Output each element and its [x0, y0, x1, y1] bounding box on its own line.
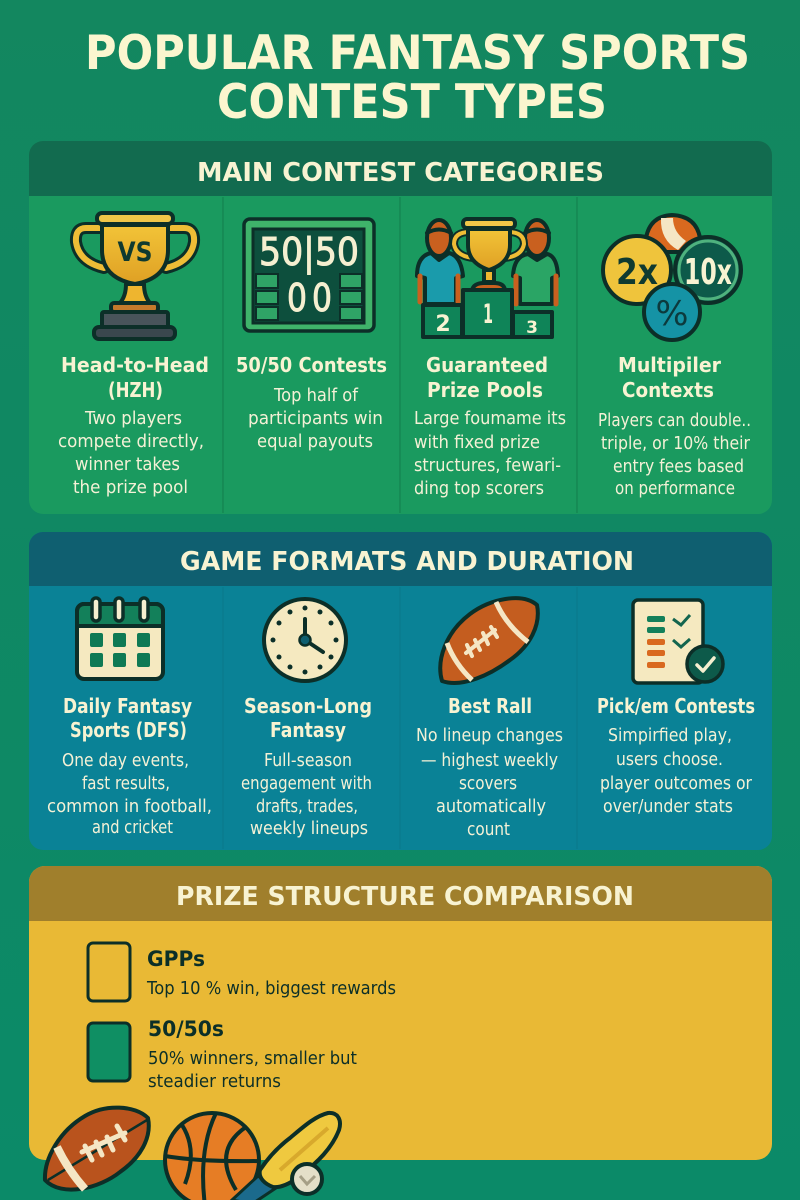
- icon: football: [440, 598, 538, 683]
- text: head-to-head: [58, 353, 209, 498]
- icon: 50/50 scoreboard: [244, 219, 374, 331]
- icon: multiplier coins: 10x: [684, 252, 732, 293]
- legend item: GPPs: GPPs: [147, 947, 205, 971]
- text: 50/50 contests: 50/50 Contests: [236, 353, 387, 377]
- text: 50/50 contests: equal payouts: [257, 432, 373, 452]
- header: game formats and duration: GAME FORMATS AND DURATION: [180, 547, 634, 577]
- text: daily fantasy sports: Sports (DFS): [70, 718, 187, 742]
- icon: bottom basketball: [165, 1113, 259, 1200]
- panel: game formats and duration: [29, 532, 772, 850]
- legend item: 50/50s: 50% winners, smaller but: [148, 1049, 357, 1069]
- text: pick'em contests: users choose.: [616, 750, 723, 770]
- text: head-to-head: (HZH): [108, 378, 163, 402]
- text: guaranteed prize pools: Large foumame its: [414, 409, 566, 429]
- text: guaranteed prize pools: structures, fewari-: [414, 456, 561, 476]
- icon: podium with players and trophy: 3: [526, 318, 538, 338]
- text: best rall: count: [467, 820, 510, 840]
- text: season-long fantasy: engagement with: [241, 774, 372, 794]
- text: multiplier contexts: entry fees based: [613, 457, 744, 477]
- icon: 50/50 scoreboard: 50|50: [259, 230, 359, 275]
- icon: clock: [264, 599, 346, 681]
- legend item: GPPs: [88, 943, 396, 1001]
- text: multiplier contexts: Contexts: [622, 378, 714, 402]
- text: best rall: automatically: [436, 797, 546, 817]
- text: daily fantasy sports: common in football,: [47, 797, 212, 817]
- text: head-to-head: the prize pool: [73, 478, 188, 498]
- text: head-to-head: compete directly,: [58, 432, 204, 452]
- text: multiplier contexts: [598, 353, 751, 499]
- text: 50/50 contests: Top half of: [273, 386, 359, 406]
- text: head-to-head: winner takes: [75, 455, 180, 475]
- icon: multiplier coins: %: [656, 294, 688, 334]
- text: multiplier contexts: Players can double..: [598, 411, 751, 431]
- text: daily fantasy sports: One day events,: [62, 751, 189, 771]
- text: best rall: [416, 694, 563, 840]
- text: daily fantasy sports: [47, 694, 212, 838]
- text: multiplier contexts: on performance: [615, 479, 735, 499]
- icon: multiplier coins: 2x: [616, 252, 658, 293]
- icon: podium with players and trophy: 1: [483, 299, 493, 330]
- header: prize structure comparison: PRIZE STRUCTURE COMPARISON: [176, 882, 634, 912]
- text: season-long fantasy: [241, 694, 372, 839]
- text: guaranteed prize pools: with fixed prize: [414, 433, 540, 453]
- icon: multiplier coins: [603, 215, 741, 340]
- text: daily fantasy sports: fast results,: [82, 774, 170, 794]
- text: pick'em contests: over/under stats: [603, 797, 733, 817]
- panel: main contest categories: [29, 141, 772, 514]
- text: best rall: scovers: [459, 774, 517, 794]
- icon: bottom cricket bat and ball: [232, 1113, 340, 1200]
- icon: calendar: [77, 598, 163, 679]
- text: season-long fantasy: Season-Long: [244, 694, 372, 718]
- header: main contest categories: MAIN CONTEST CATEGORIES: [197, 158, 604, 188]
- text: season-long fantasy: weekly lineups: [250, 819, 368, 839]
- icon: bottom football: [45, 1108, 149, 1190]
- header: main contest categories: [29, 141, 772, 196]
- title: POPULAR FANTASY SPORTS: [85, 26, 750, 81]
- icon: 50/50 scoreboard: 0: [312, 276, 332, 320]
- icon: podium with players and trophy: [417, 219, 558, 338]
- text: season-long fantasy: Full-season: [264, 751, 352, 771]
- legend item: 50/50s: 50/50s: [148, 1017, 224, 1041]
- text: multiplier contexts: Multipiler: [618, 353, 721, 377]
- header: prize structure comparison: [29, 866, 772, 921]
- icon: podium with players and trophy: 2: [435, 312, 451, 337]
- text: 50/50 contests: [236, 353, 387, 452]
- text: head-to-head: Head-to-Head: [61, 353, 209, 377]
- text: best rall: No lineup changes: [416, 726, 563, 746]
- legend item: 50/50s: steadier returns: [148, 1072, 281, 1092]
- text: pick'em contests: [597, 694, 755, 817]
- legend item: 50/50s: [88, 1017, 357, 1092]
- text: guaranteed prize pools: Guaranteed: [426, 353, 548, 377]
- icon: 50/50 scoreboard: 0: [287, 276, 307, 320]
- text: guaranteed prize pools: [414, 353, 566, 499]
- title: [85, 26, 750, 130]
- text: daily fantasy sports: Daily Fantasy: [63, 694, 192, 718]
- text: pick'em contests: player outcomes or: [600, 774, 753, 794]
- icon: VS trophy: VS: [118, 237, 152, 268]
- text: 50/50 contests: participants win: [248, 409, 383, 429]
- title: CONTEST TYPES: [217, 75, 607, 130]
- text: pick'em contests: Simpirfied play,: [608, 726, 732, 746]
- text: guaranteed prize pools: Prize Pools: [427, 378, 543, 402]
- legend item: GPPs: Top 10 % win, biggest rewards: [146, 979, 396, 999]
- text: season-long fantasy: Fantasy: [270, 718, 346, 742]
- panel: prize structure comparison: [29, 866, 772, 1160]
- text: pick'em contests: Pick/em Contests: [597, 694, 755, 718]
- text: head-to-head: Two players: [84, 409, 182, 429]
- header: game formats and duration: [29, 532, 772, 586]
- text: daily fantasy sports: and cricket: [92, 818, 173, 838]
- text: multiplier contexts: triple, or 10% their: [601, 434, 751, 454]
- text: best rall: Best Rall: [448, 694, 532, 718]
- icon: checklist: [633, 600, 723, 683]
- text: guaranteed prize pools: ding top scorers: [414, 479, 544, 499]
- text: best rall: — highest weekly: [421, 751, 558, 771]
- text: season-long fantasy: drafts, trades,: [256, 797, 358, 817]
- icon: VS trophy: [76, 213, 194, 339]
